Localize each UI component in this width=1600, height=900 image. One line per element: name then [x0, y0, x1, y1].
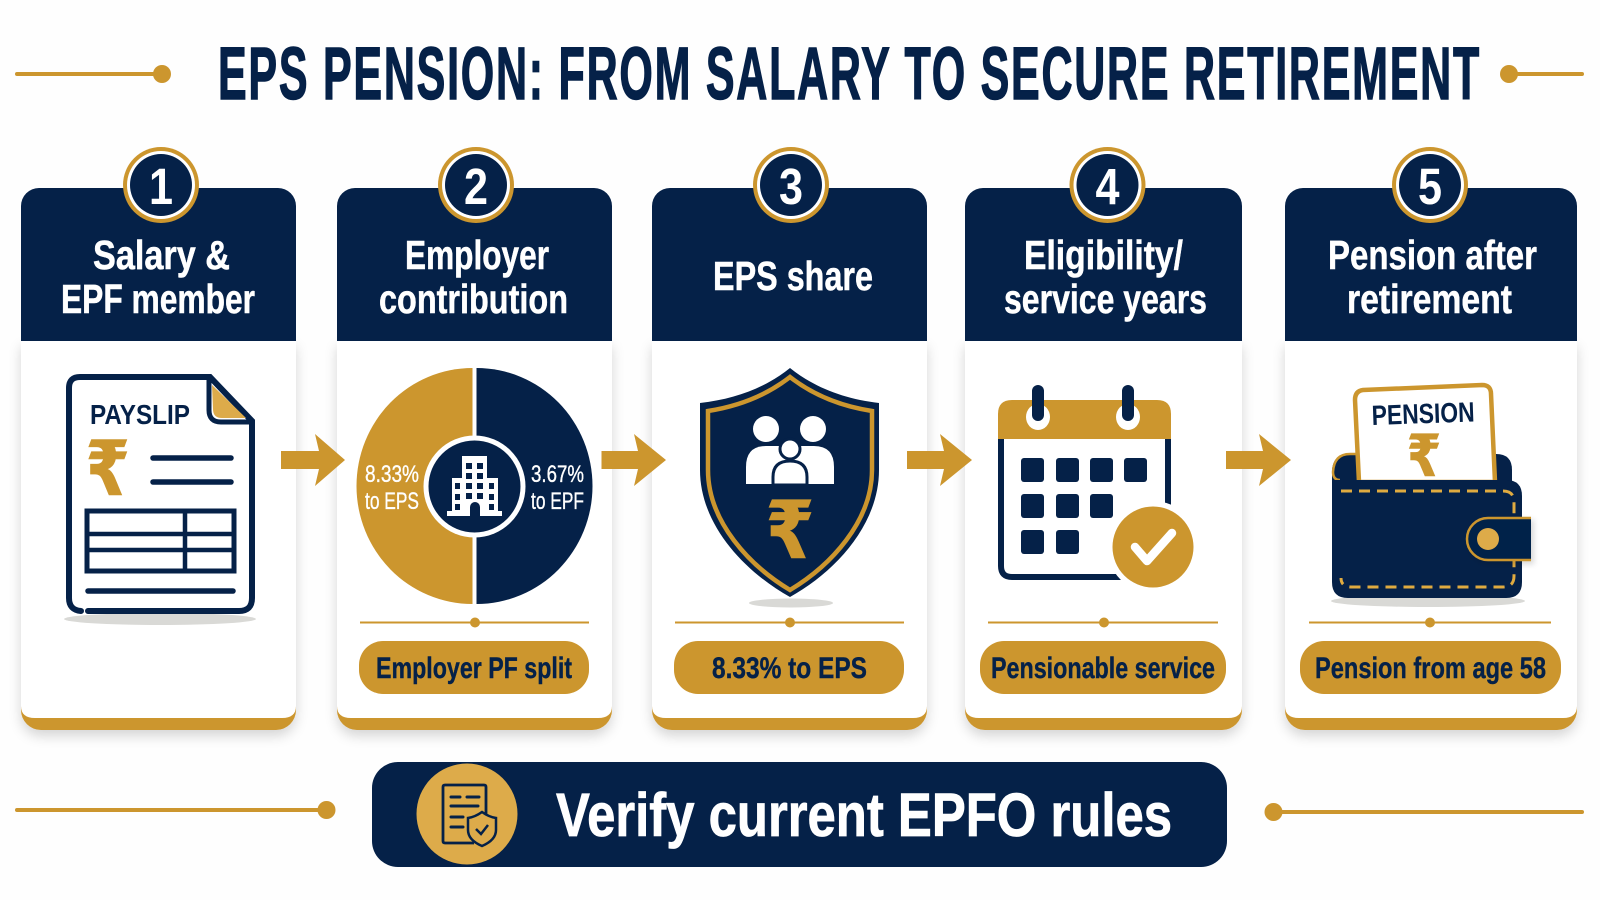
- card 2 heading: contribution: [379, 276, 568, 322]
- icon: building: [447, 456, 502, 516]
- banner: verify EPFO rules: [372, 762, 1227, 867]
- pill: pension from age 58: [1300, 641, 1561, 694]
- clasp: [1467, 518, 1531, 560]
- card 5 heading: retirement: [1347, 276, 1512, 322]
- pie label EPS: [365, 461, 419, 515]
- icon: document with shield: [416, 764, 518, 864]
- title decoration right: [1500, 65, 1584, 83]
- card 1 heading: EPF member: [61, 276, 255, 322]
- footer decoration left: [15, 801, 336, 819]
- arrow 4 to 5: [1226, 434, 1291, 486]
- card 3 heading: EPS share: [713, 253, 873, 299]
- card 3 base: [652, 341, 927, 730]
- pill: employer PF split: Employer PF split: [376, 652, 572, 685]
- card 4 heading: Eligibility/: [1024, 232, 1183, 278]
- divider 2: [360, 618, 589, 628]
- divider 3: [675, 618, 904, 628]
- card 2 header: [337, 188, 612, 341]
- card 5 header: [1285, 188, 1577, 341]
- footer decoration right: [1264, 803, 1584, 821]
- banner: verify EPFO rules: Verify current EPFO rules: [556, 781, 1172, 849]
- pension slip: PENSION: [1371, 396, 1475, 431]
- icon: wallet with pension slip: [1331, 385, 1531, 607]
- pie label EPS: to EPS: [365, 488, 419, 515]
- pension slip: [1355, 385, 1495, 489]
- card 2 base: [337, 341, 612, 730]
- panel: step 4: [965, 147, 1242, 730]
- badge 2: [438, 147, 514, 223]
- card 4 header: [965, 188, 1242, 341]
- people: [746, 416, 834, 488]
- arrow 1 to 2: [281, 434, 345, 486]
- card 1 heading: Salary &: [93, 232, 230, 278]
- badge 3: 3: [779, 158, 803, 215]
- pill: 8.33% to EPS: 8.33% to EPS: [712, 652, 867, 685]
- badge 3: [753, 147, 829, 223]
- badge 4: [1070, 147, 1146, 223]
- pie label EPF: 3.67%: [531, 461, 584, 488]
- check badge: [1107, 501, 1199, 593]
- icon: shield: ₹: [766, 486, 814, 575]
- icon: payslip: [64, 377, 256, 625]
- badge 1: 1: [149, 158, 173, 215]
- panel: step 5: [1285, 147, 1577, 730]
- card 1 header: [21, 188, 296, 341]
- icon: payslip: PAYSLIP: [90, 399, 190, 430]
- card 2 heading: [379, 232, 568, 322]
- pie label EPF: to EPF: [531, 488, 584, 515]
- divider 5: [1309, 618, 1551, 628]
- pie label EPF: [531, 461, 584, 515]
- arrow 2 to 3: [602, 434, 666, 486]
- divider 4: [988, 618, 1218, 628]
- pie label EPS: 8.33%: [365, 461, 419, 488]
- badge 1: [123, 147, 199, 223]
- card 5 base: [1285, 341, 1577, 730]
- pension slip: ₹: [1407, 424, 1441, 489]
- badge 2: 2: [464, 158, 488, 215]
- title decoration left: [15, 65, 171, 83]
- icon: payslip: ₹: [86, 427, 130, 512]
- panel: step 2: [337, 147, 612, 730]
- icon: calendar: [998, 385, 1199, 593]
- card 4 base: [965, 341, 1242, 730]
- card 1 heading: [61, 232, 255, 322]
- card 1 base: [21, 341, 296, 730]
- card 5 heading: Pension after: [1328, 232, 1537, 278]
- arrow 3 to 4: [907, 434, 972, 486]
- pill: pension from age 58: Pension from age 58: [1315, 652, 1546, 685]
- panel: step 3: [652, 147, 927, 730]
- badge 5: 5: [1418, 158, 1442, 215]
- icon: shield: [700, 368, 879, 608]
- pill: employer PF split: [359, 641, 589, 694]
- pill: pensionable service: [980, 641, 1226, 694]
- card 4 heading: [1004, 232, 1207, 322]
- badge 4: 4: [1096, 158, 1120, 215]
- pill: 8.33% to EPS: [674, 641, 904, 694]
- card 4 heading: service years: [1004, 276, 1207, 322]
- card 3 header: [652, 188, 927, 341]
- card 2 heading: Employer: [405, 232, 549, 278]
- panel: step 1: [21, 147, 296, 730]
- pie chart: employer split: [357, 368, 592, 604]
- card 5 heading: [1328, 232, 1537, 322]
- pill: pensionable service: Pensionable service: [991, 652, 1215, 685]
- badge 5: [1392, 147, 1468, 223]
